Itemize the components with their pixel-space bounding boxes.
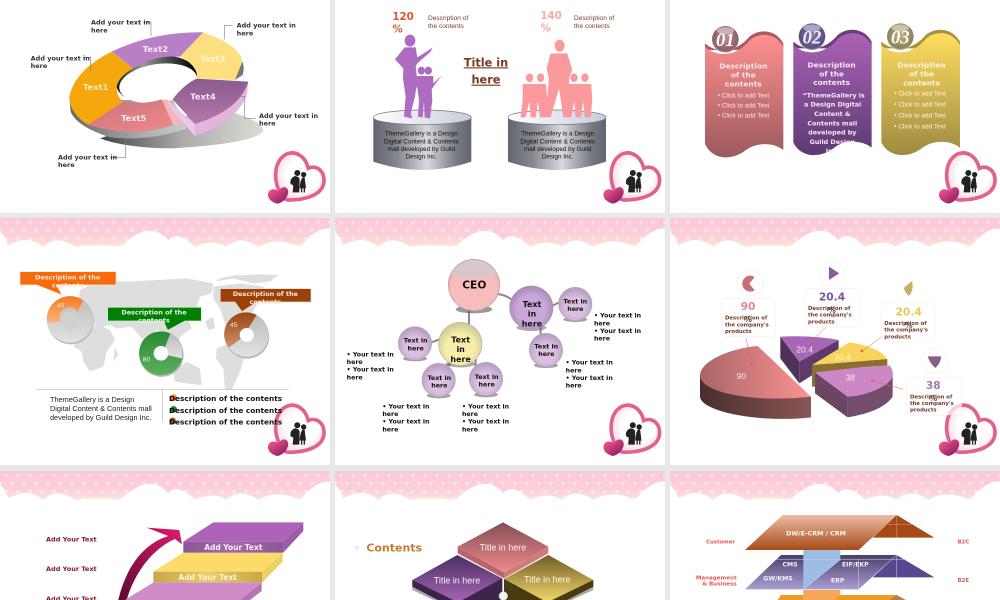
callout: 90: %: [744, 315, 752, 324]
slice: 90: [700, 346, 811, 419]
bullets lower right: here: [462, 426, 478, 433]
icon: mauve shield: [922, 348, 947, 373]
callout: 20.4 purple: Description of: [808, 306, 850, 312]
slice: 38: 38: [846, 372, 855, 382]
node: left: here: [408, 345, 424, 352]
label: top right: Add your text in: [237, 22, 296, 30]
bullets lower right: • Your text in: [462, 403, 509, 410]
layer: DW/E-CRM: [745, 515, 897, 550]
step: purple: Add Your Text: [204, 543, 263, 552]
callout: green: contents: [138, 317, 170, 325]
panel: silhouettes on pedestals: [373, 10, 614, 170]
left pedestal: [373, 110, 471, 170]
pointer lines: [746, 328, 903, 389]
heading 03: contents: [903, 78, 941, 87]
right pedestal: [508, 110, 606, 170]
panel: contents diamonds: [355, 522, 593, 600]
callout: 90: 90: [741, 300, 755, 313]
label 1: Add Your Text: [46, 535, 97, 543]
label: left: here: [31, 62, 48, 70]
description left: Description of: [428, 15, 468, 22]
diamond: right gold: Title in here: [524, 574, 571, 584]
ribbon 02: [793, 30, 872, 155]
callout: brown: contents: [249, 298, 281, 306]
legend: Description of the contents: [169, 417, 283, 426]
step: yellow: [153, 553, 283, 582]
bullets lower left: • Your text in: [382, 419, 429, 426]
list 03: • Click to add Text: [894, 91, 946, 98]
segment: Text1: Text1: [83, 82, 109, 92]
callout: 20.4 purple: 20.4: [819, 291, 845, 304]
callout: 38: Description of: [910, 394, 952, 400]
orb 02: 02: [803, 27, 821, 48]
node: CEO: CEO: [462, 279, 486, 292]
white ball: [499, 592, 508, 600]
side label: Management: Management: [696, 575, 737, 581]
segment: Text3: [180, 32, 242, 80]
node: lower left: Text in: [427, 375, 451, 382]
orb 01: [712, 26, 739, 53]
heading 02: of the: [819, 69, 844, 78]
segment: Text2: Text2: [143, 44, 168, 54]
node: right top: Text in: [563, 298, 587, 305]
node: purple: here: [522, 320, 543, 329]
label 2: Add Your Text: [46, 565, 97, 573]
diamond: top rose: Title in here: [480, 543, 526, 553]
layer: top triangle: [873, 515, 934, 538]
donut shadow: [100, 112, 263, 148]
description right: Description of: [574, 15, 614, 22]
orb 03: 03: [891, 27, 910, 48]
icon: purple wedge: [819, 261, 845, 286]
callout: 20.4 yellow: 20.4: [895, 306, 922, 319]
node: right bottom: Text in: [534, 343, 558, 350]
slice: 20.4 purple: [780, 336, 839, 383]
label: bottom: here: [58, 161, 75, 169]
node: lower left: [422, 363, 455, 398]
list 01: • Click to add Text: [718, 102, 769, 109]
callout: 90: Description of: [725, 316, 767, 322]
callout: 20.4 purple: [805, 288, 859, 327]
description text: developed by Guild Design Inc.: [50, 413, 151, 422]
node: lower right: here: [479, 382, 495, 389]
layer: orange plane: [778, 590, 906, 600]
callout: orange: Description of the: [35, 273, 100, 281]
slice: 20.4 yellow: [812, 342, 887, 387]
node: right bottom: here: [538, 351, 554, 358]
hole: [117, 59, 200, 108]
segment: Text3: Text3: [200, 54, 226, 64]
list 01: • Click to add Text: [718, 92, 769, 99]
body 02: “ThemeGallery is: [803, 91, 865, 99]
callout: 38: 38: [926, 379, 941, 392]
node: right top: [559, 287, 592, 322]
node: right bottom: [529, 333, 563, 368]
callout: brown: [220, 289, 311, 312]
heading 03: of the: [909, 70, 934, 79]
callout: 90: products: [725, 329, 752, 335]
side label: Management: & Business: [702, 582, 737, 588]
panel: three ribbons: [705, 23, 960, 157]
pink heart and cloud headers: [0, 218, 1000, 511]
centre title: here: [471, 73, 501, 87]
icon: yellow leaf: [896, 276, 921, 302]
node: purple: in: [528, 310, 537, 319]
callout: brown: Description of the: [233, 290, 298, 298]
bullets right top: here: [594, 336, 610, 343]
panel: 3D donut chart: [31, 19, 319, 169]
heading: Contents: Contents: [366, 541, 423, 554]
bullets lower left: here: [382, 411, 398, 418]
heading 01: Description: [719, 61, 767, 70]
label: bottom: Add your text in: [58, 153, 117, 161]
callout: 38: products: [910, 408, 937, 414]
side label: Customer: Customer: [706, 539, 735, 545]
pedestal text right: Digital Content & Contents: [520, 138, 595, 145]
panel: stacked steps with arrow: [46, 522, 303, 600]
heading 02: contents: [813, 78, 851, 87]
panel: layered business diagram: [696, 515, 969, 600]
woman and girls silhouette: [395, 35, 442, 118]
node: yellow: in: [456, 345, 465, 354]
label: top: here: [91, 26, 108, 34]
callout: green: Description of the: [121, 309, 187, 317]
connectors: [429, 294, 561, 368]
leader lines: [83, 22, 256, 158]
stat: 120%: 120: [392, 11, 414, 23]
callout: orange: contents: [52, 281, 84, 289]
layer: middle triangle: [873, 555, 934, 577]
step: pink: [125, 582, 262, 600]
layer labels: [763, 561, 869, 585]
callout: green: [108, 307, 201, 330]
label: top right: here: [237, 29, 254, 37]
bullets left: • Your text in: [347, 367, 394, 374]
bullets left: here: [347, 374, 363, 381]
donut: 40: 40: [57, 302, 64, 309]
callout: 20.4 yellow: products: [884, 334, 911, 340]
stat: 140%: 140: [540, 10, 562, 22]
panel: exploded 3D pie chart: [700, 261, 962, 419]
pedestal text left: Design Inc.: [405, 154, 437, 161]
diamond: right gold: [504, 555, 593, 600]
callout: 90: the company's: [725, 322, 769, 328]
node: purple: Text: [523, 300, 541, 309]
pedestal text right: mall developed by Guild: [524, 146, 592, 153]
node: left: [398, 327, 432, 361]
description text: ThemeGallery is a Design: [50, 395, 134, 404]
orb 01: 01: [716, 30, 735, 51]
layer labels: EIP/EKP: [842, 561, 869, 568]
legend: Description of the contents: [169, 394, 283, 403]
bullets right bottom: • Your text in: [566, 360, 613, 367]
callout: 20.4 purple: %: [828, 306, 836, 315]
segment: Text5: Text5: [121, 113, 147, 123]
bullets lower right: • Your text in: [462, 419, 509, 426]
layer: DW/E-CRM: DW/E-CRM / CRM: [786, 530, 846, 537]
node: yellow: here: [450, 355, 471, 364]
step: purple: [183, 522, 303, 553]
callout: 20.4 yellow: %: [905, 321, 913, 330]
bullets right top: here: [594, 320, 610, 327]
callout: orange: [20, 272, 116, 295]
pedestal text right: ThemeGallery is a Design: [521, 131, 594, 138]
node: purple: [510, 286, 553, 331]
diamond: left purple: [412, 555, 502, 600]
slice: 20.4 yellow: 20.4: [834, 352, 851, 362]
legend: Description of the contents: [169, 406, 283, 415]
pedestal text left: ThemeGallery is a Design: [385, 131, 458, 138]
callout: 20.4 purple: products: [808, 319, 835, 325]
segment: Text2: [112, 32, 203, 68]
bullets right bottom: here: [566, 383, 582, 390]
body 02: Contents mall: [807, 119, 857, 127]
node: lower right: Text in: [475, 374, 499, 381]
segment: Text5: [88, 99, 183, 132]
ribbon 03: [881, 30, 960, 155]
slice: 90: 90: [737, 371, 746, 381]
body 02: Inc.: [826, 147, 839, 155]
bullets right bottom: here: [566, 367, 582, 374]
node: yellow: Text: [451, 335, 470, 344]
donut: 45: [224, 312, 269, 359]
heading 01: contents: [725, 79, 762, 88]
label: right: here: [259, 120, 276, 128]
donut: 80: 80: [143, 356, 150, 363]
cloud bottom edge over ribbon 02: [834, 142, 872, 157]
body 02: Guild Design: [810, 138, 856, 146]
list 01: • Click to add Text: [718, 113, 769, 120]
list 03: • Click to add Text: [894, 112, 946, 119]
bullets left: • Your text in: [347, 351, 394, 358]
orb 03: [887, 23, 914, 50]
heading 02: Description: [808, 61, 856, 70]
layer labels: GW/KMS: [763, 576, 793, 583]
callout: 38: %: [929, 394, 937, 403]
segment: Text1: [69, 52, 133, 125]
group of men silhouette: [521, 40, 592, 117]
bullets left: here: [347, 359, 363, 366]
blue column: [803, 550, 840, 590]
donut side: [69, 97, 187, 138]
donut: 80: [139, 331, 184, 377]
donut: 45: 45: [230, 322, 238, 329]
side label: B2E: B2E: [958, 578, 969, 584]
legend: [169, 394, 283, 426]
callout: 20.4 purple: the company's: [808, 313, 852, 319]
description left: the contents: [428, 23, 465, 30]
step: yellow: Add Your Text: [179, 573, 237, 582]
list 03: • Click to add Text: [894, 101, 946, 108]
slice: 38: [815, 366, 893, 417]
pedestal text left: Digital Content & Contents: [384, 138, 459, 145]
diamond: top rose: [458, 522, 548, 578]
heart logos with kissing couple: [268, 153, 995, 456]
icon: pink pacman: [737, 271, 763, 296]
stat: 140%: %: [540, 23, 551, 35]
node: left: Text in: [404, 338, 428, 345]
callout: 20.4 yellow: [880, 303, 935, 343]
description right: the contents: [574, 23, 611, 30]
segment: Text4 exploded: [167, 79, 248, 136]
bullets lower left: • Your text in: [382, 403, 429, 410]
label: left: Add your text in: [31, 54, 90, 62]
callout: 20.4 yellow: the company's: [884, 328, 928, 334]
list 03: • Click to add Text: [894, 123, 946, 130]
layer labels: CMS: [782, 561, 798, 568]
node: yellow: [439, 322, 482, 367]
body 02: Content &: [814, 110, 851, 118]
callout: 38: [907, 378, 962, 415]
node: lower left: here: [431, 383, 447, 390]
body 02: developed by: [808, 129, 857, 137]
heading 01: of the: [731, 70, 756, 79]
layer labels: ERP: [831, 578, 845, 585]
segment: Text4 exploded: Text4: [190, 91, 216, 101]
orb 02: [799, 23, 825, 50]
pedestal text left: mall developed by Guild: [388, 146, 456, 153]
side label: B2C: B2C: [958, 539, 969, 545]
pedestal text right: Design Inc.: [542, 154, 574, 161]
slice: 20.4 purple: 20.4: [796, 344, 813, 354]
stat: 120%: %: [392, 24, 403, 36]
body 02: a Design Digital: [804, 101, 861, 109]
callout: 20.4 yellow: Description of: [884, 321, 927, 327]
heading 03: Description: [898, 61, 946, 70]
bullets lower left: here: [382, 426, 398, 433]
panel: CEO org chart: [347, 259, 641, 433]
bullets right top: • Your text in: [594, 328, 641, 335]
node: lower right: [469, 362, 503, 397]
world map: [74, 274, 278, 390]
ribbon 01: [705, 31, 783, 157]
label: right: Add your text in: [259, 112, 318, 120]
label: top: Add your text in: [91, 19, 150, 27]
panel: world map with donuts: [20, 272, 311, 426]
node: CEO: [448, 259, 500, 313]
callout: 38: the company's: [910, 401, 954, 407]
centre title: Title in: [464, 55, 508, 69]
layer: middle plane: [745, 555, 897, 589]
bullets right top: • Your text in: [594, 313, 641, 320]
node: right top: here: [567, 306, 583, 313]
description text: Digital Content & Contents mall: [50, 404, 152, 413]
hole rim: [113, 51, 200, 108]
callout: 90: [722, 298, 776, 337]
curved arrow: [118, 528, 182, 600]
bullets right bottom: • Your text in: [566, 375, 613, 382]
donut: 40: [47, 296, 94, 344]
diamond: left purple: Title in here: [434, 576, 480, 586]
bullets lower right: here: [462, 411, 478, 418]
